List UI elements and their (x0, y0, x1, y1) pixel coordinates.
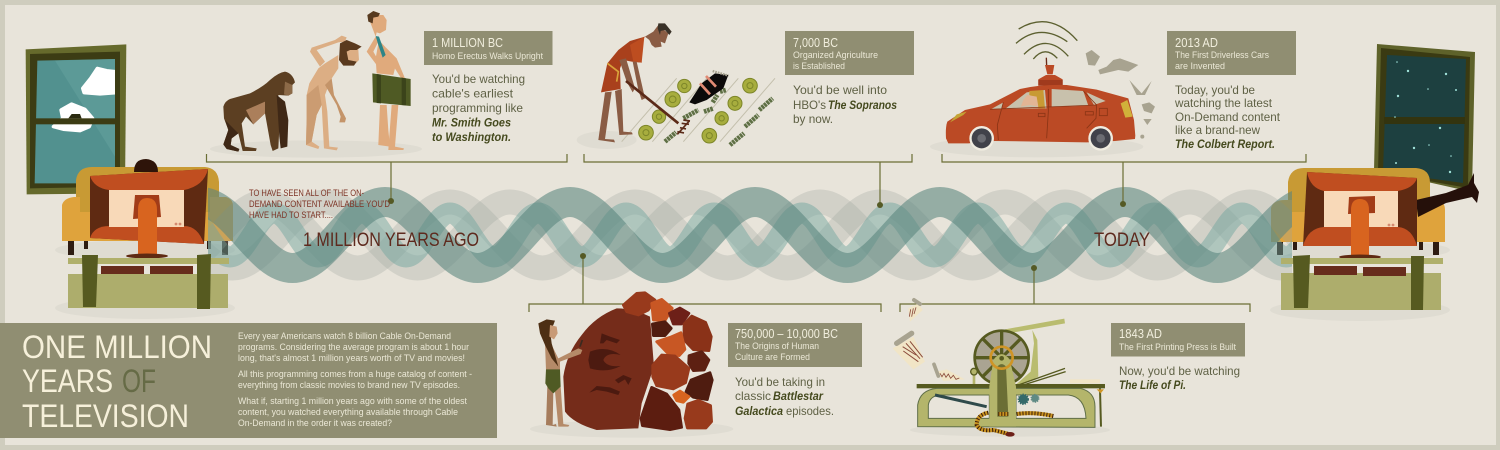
caveman hair (339, 40, 362, 66)
cave woman (538, 319, 582, 427)
title: OF (122, 363, 156, 399)
text block 1: programming like (432, 101, 523, 115)
node 3 (1120, 201, 1126, 207)
caveman head (343, 45, 359, 65)
title panel (0, 323, 497, 438)
smoke shapes (1086, 50, 1155, 139)
door lines (990, 89, 1107, 140)
node 5 (1031, 265, 1037, 271)
legs on couch (1416, 173, 1479, 217)
text block 5: Now, you'd be watching (1119, 364, 1240, 378)
stacked rocks (623, 293, 712, 430)
node 4 (580, 253, 586, 259)
wifi arcs (1016, 22, 1077, 59)
right monitor (1303, 172, 1417, 260)
left monitor (90, 169, 208, 258)
bracket 3 (942, 154, 1306, 204)
text block 4 (735, 375, 834, 418)
left couch (55, 159, 235, 260)
bracket 1 (206, 154, 567, 201)
label: 1 million years ago: 1 MILLION YEARS AGO (303, 230, 479, 251)
antenna unit (1038, 58, 1063, 86)
text block 1: Mr. Smith Goes (432, 116, 511, 130)
evolution figures (210, 11, 422, 158)
bracket 4 (529, 256, 881, 312)
ape (223, 72, 295, 152)
business man (367, 15, 405, 150)
heading box 5: The First Printing Press is Built (1119, 342, 1236, 353)
caveman (306, 55, 338, 150)
text block 2 (793, 83, 897, 126)
heading box 5 (1111, 323, 1245, 356)
text block 4: Battlestar (773, 389, 824, 403)
heading box 5: 1843 AD (1119, 327, 1162, 341)
bracket 5 (900, 268, 1250, 312)
node 1 (388, 198, 394, 204)
intro red text: HAVE HAD TO START.... (249, 210, 333, 221)
text block 2: The Sopranos (828, 98, 897, 112)
text block 1: cable's earliest (432, 86, 514, 100)
farmer illustration (577, 23, 775, 149)
title: TELEVISION (22, 398, 189, 434)
cave rock illustration (530, 293, 733, 438)
text block 1: to Washington. (432, 130, 511, 144)
text block 4: You'd be taking in (735, 375, 825, 389)
intro red text: DEMAND CONTENT AVAILABLE YOU'D (249, 199, 390, 210)
text block 2: You'd be well into (793, 83, 887, 97)
text block 2: HBO's (793, 98, 826, 112)
title: ONE MILLION (22, 329, 212, 365)
briefcase (372, 73, 411, 106)
heading box 3: The First Driverless Cars (1175, 50, 1269, 61)
title: YEARS (22, 363, 113, 399)
main rock (563, 308, 654, 430)
text block 3: like a brand-new (1175, 123, 1260, 137)
heading box 2 (785, 31, 914, 75)
title (22, 329, 212, 434)
caveman arms (306, 36, 347, 145)
car windows (991, 89, 1106, 109)
text block 3 (1174, 83, 1281, 151)
heading box 2: Organized Agriculture (793, 50, 878, 61)
heading box 4: The Origins of Human (735, 341, 819, 352)
text block 3: Today, you'd be (1175, 83, 1255, 97)
driverless car illustration (930, 22, 1155, 157)
intro paragraphs: On-Demand in the order it was created? (238, 418, 392, 429)
right couch (1270, 168, 1450, 260)
right window (1374, 44, 1475, 192)
heading box 4: Culture are Formed (735, 352, 810, 363)
heading box 3: are Invented (1175, 61, 1225, 72)
heading box 4: 750,000 – 10,000 BC (735, 327, 838, 341)
wheels (969, 126, 1113, 151)
left tv stand (55, 254, 235, 319)
intro paragraphs: What if, starting 1 million years ago with some of the oldest (238, 396, 467, 407)
tie (376, 36, 386, 58)
label: today: TODAY (1094, 230, 1150, 251)
heading box 1: Homo Erectus Walks Upright (432, 51, 543, 62)
intro paragraphs: All this programming comes from a huge catalog of content - (238, 369, 472, 380)
wave timeline (15, 202, 1500, 268)
heading box 2: 7,000 BC (793, 36, 838, 50)
text block 5 (1119, 364, 1240, 392)
man hair (367, 11, 380, 23)
text block 4: classic (735, 389, 771, 403)
intro paragraphs: Every year Americans watch 8 billion Cable On-Demand (238, 331, 451, 342)
ape shading (223, 82, 292, 152)
text block 3: watching the latest (1174, 96, 1273, 110)
intro paragraphs (238, 331, 472, 429)
printing press illustration (893, 300, 1110, 437)
node 2 (877, 202, 883, 208)
heading box 1: 1 MILLION BC (432, 36, 503, 50)
bracket 2 (584, 154, 912, 205)
cave paintings (588, 333, 632, 395)
text block 5: The Life of Pi. (1119, 378, 1186, 392)
car body (946, 85, 1135, 143)
text block 2: by now. (793, 112, 833, 126)
driver (1021, 90, 1045, 108)
text block 4: Galactica (735, 404, 783, 418)
car lights (950, 100, 1133, 122)
intro paragraphs: content, you watched everything available through Cable (238, 407, 458, 418)
left window (26, 44, 126, 194)
intro paragraphs: long, that's almost 1 million years worth of TV and movies! (238, 353, 465, 364)
intro paragraphs: programs. Considering the average program is about 1 hour (238, 342, 469, 353)
text block 4: episodes. (786, 404, 834, 418)
heading box 2: is Established (793, 61, 845, 72)
intro red text (249, 188, 390, 221)
text block 1: You'd be watching (432, 72, 525, 86)
text block 3: On-Demand content (1175, 110, 1281, 124)
intro red text: TO HAVE SEEN ALL OF THE ON- (249, 188, 364, 199)
heading box 1 (424, 31, 552, 65)
heading box 3 (1167, 31, 1296, 75)
text block 1 (432, 72, 525, 144)
text block 3: The Colbert Report. (1175, 137, 1275, 151)
intro paragraphs: everything from classic movies to brand new TV episodes. (238, 380, 460, 391)
heading box 4 (728, 323, 862, 367)
heading box 3: 2013 AD (1175, 36, 1218, 50)
right tv stand (1270, 255, 1450, 321)
